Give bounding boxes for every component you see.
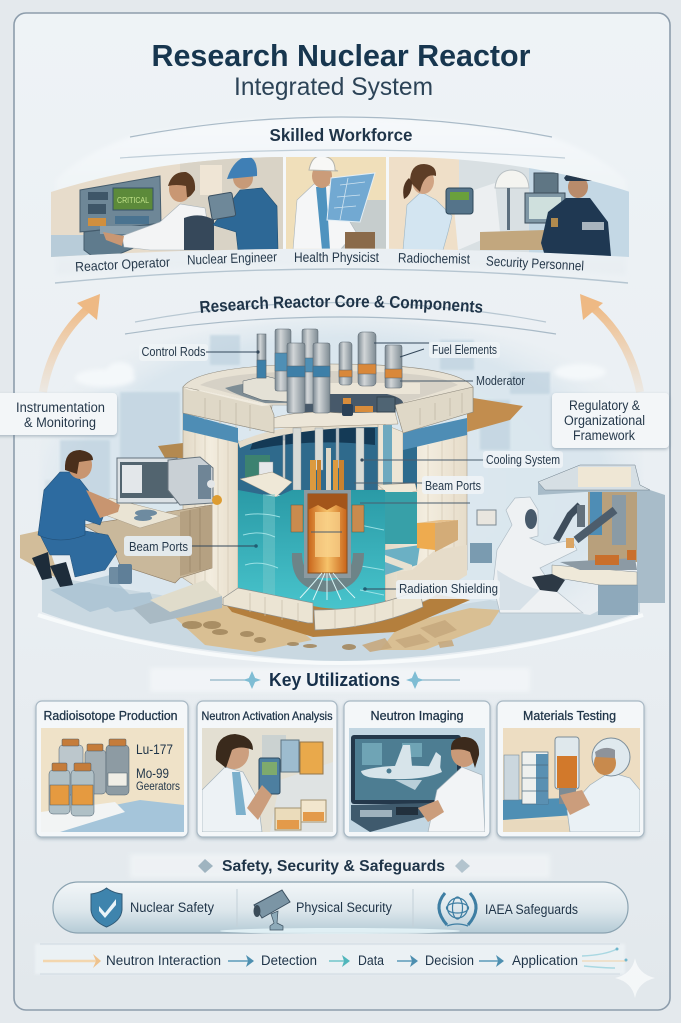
panel: neutron data flow bbox=[35, 944, 628, 974]
panel: neutron activation analysis card: Neutron Activation Analysis bbox=[202, 709, 332, 723]
callout: instrumentation and monitoring: Instrumentation bbox=[16, 400, 105, 415]
aircraft bbox=[361, 766, 442, 779]
core bbox=[304, 490, 351, 578]
base front right bbox=[314, 590, 423, 630]
panel: neutron imaging card: Neutron Imaging bbox=[370, 708, 464, 723]
text: decision: Decision bbox=[425, 953, 474, 968]
fuel rods in pool bbox=[291, 448, 364, 532]
callout: regulatory framework: Regulatory & bbox=[569, 398, 640, 413]
title: Integrated System bbox=[234, 73, 433, 101]
band: workforce banner bbox=[56, 117, 626, 275]
operator figure bbox=[122, 204, 212, 250]
panel: radioisotope production card: Mo-99 bbox=[136, 765, 169, 781]
black bag bbox=[532, 574, 565, 592]
shielding arc around core bbox=[292, 553, 364, 592]
title: Research Nuclear Reactor bbox=[152, 38, 530, 73]
panel: safety pill bbox=[53, 882, 628, 934]
scientist bbox=[202, 767, 262, 832]
label: beam ports left bbox=[124, 536, 258, 556]
interior upper bbox=[238, 425, 378, 495]
vials bbox=[49, 739, 129, 816]
label: beam ports right: Beam Ports bbox=[425, 479, 481, 493]
small items on deck bbox=[342, 404, 353, 416]
right ring segment bbox=[395, 387, 473, 433]
panel: radioisotope production card: Geerators bbox=[136, 779, 180, 793]
blue band bbox=[183, 413, 238, 443]
icon: sparkle star bbox=[615, 958, 655, 998]
inner scaffolds bbox=[259, 428, 364, 490]
text: neutron interaction: Neutron Interaction bbox=[106, 953, 221, 968]
keyboard desk bbox=[92, 498, 180, 528]
label: fuel elements bbox=[374, 342, 500, 358]
table bbox=[503, 798, 568, 820]
heading: reactor core: Research Reactor Core & Components bbox=[200, 295, 482, 313]
illustrations: workforce roles: CRITICAL bbox=[117, 196, 149, 205]
panel: neutron imaging card bbox=[344, 701, 490, 837]
role labels: Nuclear Engineer bbox=[187, 249, 278, 268]
arrow: right feedback bbox=[580, 294, 640, 392]
health physicist figure bbox=[293, 184, 356, 250]
left cylinder wall bbox=[183, 413, 238, 605]
water pool bbox=[238, 490, 385, 609]
right cylinder wall bbox=[385, 420, 467, 612]
arrow: to application bbox=[479, 955, 504, 967]
security guard figure bbox=[541, 198, 611, 256]
desk bbox=[83, 505, 212, 583]
worker torso bbox=[38, 472, 103, 540]
laboratory equipment bbox=[453, 183, 500, 250]
worker legs bbox=[40, 530, 117, 577]
bottom white arc bbox=[38, 615, 643, 663]
cubes bbox=[275, 808, 301, 830]
callout: instrumentation and monitoring bbox=[0, 393, 117, 435]
wooden side platforms bbox=[158, 443, 183, 458]
left ring segment bbox=[183, 387, 274, 433]
floor tiles bbox=[172, 605, 500, 652]
text: detection: Detection bbox=[261, 953, 317, 968]
role labels: Security Personnel bbox=[486, 253, 584, 274]
engineer figure bbox=[213, 188, 278, 250]
orange crate bbox=[417, 523, 435, 550]
label: beam ports left: Beam Ports bbox=[129, 540, 188, 554]
panel: materials testing card: Materials Testing bbox=[523, 708, 616, 723]
panel: materials testing card bbox=[497, 701, 644, 837]
illustrations: workforce roles bbox=[51, 157, 629, 257]
panel: skilled workforce bbox=[51, 117, 629, 283]
heading: skilled workforce: Skilled Workforce bbox=[270, 125, 413, 145]
text: physical security: Physical Security bbox=[296, 900, 392, 915]
arrow: neutron glow bbox=[43, 954, 101, 968]
label: radiation shielding bbox=[363, 580, 500, 599]
callout: regulatory framework bbox=[552, 393, 669, 448]
floor bbox=[42, 575, 640, 662]
heading: key utilizations: Key Utilizations bbox=[269, 669, 400, 690]
lab items bbox=[477, 510, 496, 525]
callout: regulatory framework: Framework bbox=[573, 428, 635, 443]
output streaks bbox=[582, 948, 628, 968]
icon: security camera bbox=[254, 890, 290, 930]
label: moderator bbox=[400, 374, 525, 388]
arrow: to decision bbox=[397, 955, 418, 967]
central deck bbox=[273, 412, 398, 428]
text: nuclear safety: Nuclear Safety bbox=[130, 900, 214, 915]
panel: radioisotope production card: Radioisotope Production bbox=[44, 708, 178, 723]
label: fuel elements: Fuel Elements bbox=[432, 343, 497, 357]
worker figure bbox=[493, 497, 583, 613]
label: radiation shielding: Radiation Shielding bbox=[399, 582, 498, 596]
label: moderator: Moderator bbox=[476, 374, 525, 388]
panel: reactor core scene bbox=[0, 294, 670, 665]
label: cooling system bbox=[360, 451, 563, 468]
operator bbox=[428, 767, 485, 832]
ledges bbox=[240, 472, 292, 497]
panel: radioisotope production card bbox=[36, 701, 188, 837]
arrow: left feedback bbox=[43, 294, 100, 392]
base front left bbox=[223, 588, 313, 623]
operator console bbox=[80, 176, 161, 232]
brown plinth bbox=[222, 590, 470, 637]
callout: regulatory framework: Organizational bbox=[564, 413, 645, 428]
boots bbox=[32, 552, 52, 580]
text: application: Application bbox=[512, 953, 578, 968]
label: control rods: Control Rods bbox=[142, 345, 206, 359]
panel: radioisotope production card: Lu-177 bbox=[136, 741, 173, 757]
jars bbox=[281, 740, 299, 772]
robot arms bbox=[556, 505, 580, 540]
arrow: to data bbox=[329, 955, 350, 967]
reactor vessel bbox=[158, 329, 523, 637]
panel: neutron activation analysis card bbox=[197, 701, 337, 837]
role labels: Radiochemist bbox=[398, 250, 470, 267]
cans bbox=[109, 567, 123, 584]
right hazmat worker and machine bbox=[470, 465, 665, 615]
background city silhouette bbox=[45, 335, 550, 525]
right column bbox=[378, 422, 403, 490]
back rim and inner deck bbox=[183, 364, 473, 432]
label: beam ports right bbox=[311, 476, 484, 532]
heading: safety security safeguards bbox=[130, 854, 550, 878]
label: cooling system: Cooling System bbox=[486, 453, 560, 467]
icon: iaea emblem bbox=[439, 893, 476, 926]
control rods and fuel cylinders bbox=[243, 329, 402, 413]
arrow: to detection bbox=[228, 955, 254, 967]
callout: instrumentation and monitoring: & Monitoring bbox=[24, 415, 96, 430]
label: control rods bbox=[139, 344, 260, 361]
technician bbox=[567, 772, 640, 832]
role labels: Reactor Operator bbox=[75, 254, 171, 274]
heading: key utilizations bbox=[150, 668, 530, 692]
text: data: Data bbox=[358, 953, 384, 968]
monitor bbox=[351, 735, 461, 804]
left monitoring worker and desk bbox=[20, 450, 222, 624]
role labels bbox=[75, 249, 584, 274]
scene backdrop bbox=[40, 316, 642, 664]
machine bbox=[588, 490, 638, 562]
radiochemist figure bbox=[403, 192, 452, 250]
machine table bbox=[598, 585, 638, 615]
computer bbox=[117, 458, 177, 503]
platform bbox=[133, 585, 222, 624]
towers bbox=[504, 755, 519, 800]
orange cylinder bbox=[555, 737, 579, 789]
keyboard desk bbox=[351, 803, 432, 832]
title bbox=[152, 38, 530, 101]
text: iaea safeguards: IAEA Safeguards bbox=[485, 902, 578, 917]
role labels: Health Physicist bbox=[294, 250, 379, 265]
right lower pool bbox=[385, 492, 417, 544]
clouds bbox=[75, 362, 606, 387]
icon: shield bbox=[91, 888, 122, 927]
heading: safety security safeguards: Safety, Security & Safeguards bbox=[222, 858, 445, 875]
